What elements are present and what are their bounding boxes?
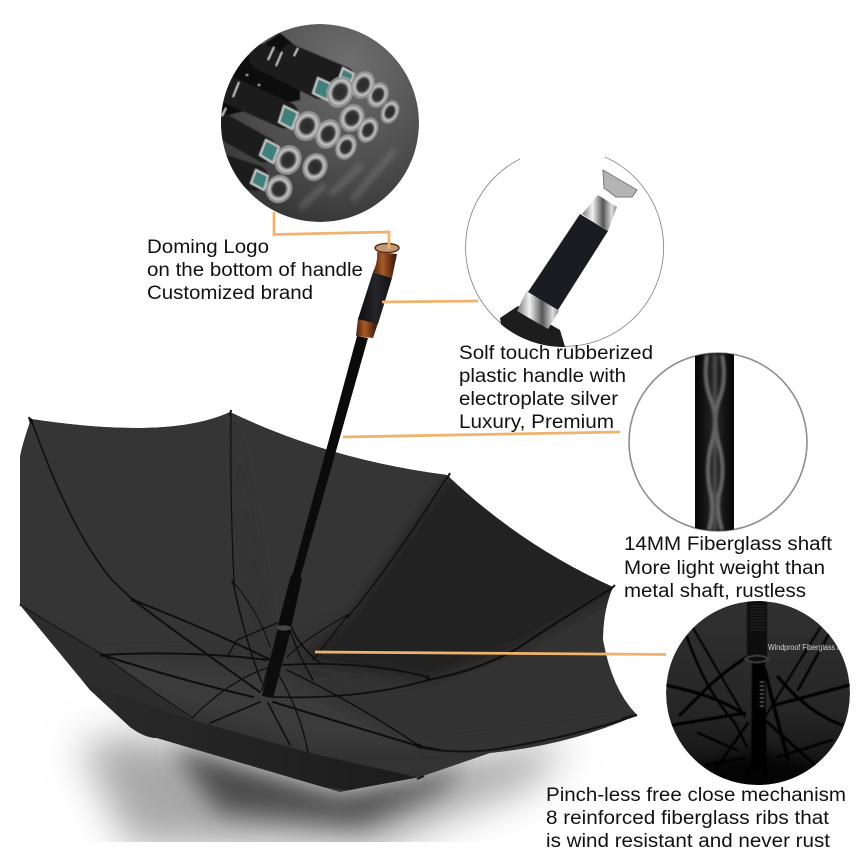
text: handle description: plastic handle with [459, 366, 626, 387]
lower spring section [262, 627, 291, 698]
handle bodies [215, 53, 345, 178]
runner ring [277, 625, 291, 631]
rib joints [100, 580, 430, 748]
text: doming logo: Customized brand [147, 283, 313, 304]
text: handle description: Solf touch rubberized [459, 343, 653, 364]
shaft body [695, 352, 734, 532]
circle: rubberized handle detail [466, 157, 664, 350]
rubber grip [358, 272, 392, 324]
spring [750, 606, 765, 630]
panel: front band [86, 684, 418, 790]
umbrella shadow [80, 735, 570, 848]
text: shaft description: metal shaft, rustless [624, 581, 806, 602]
circle: handle bottoms with logo [215, 24, 419, 222]
teal brackets [251, 68, 354, 190]
line: grip to handle detail [382, 301, 478, 302]
silver ring [517, 290, 559, 329]
base cap [500, 306, 566, 350]
text: shaft description [624, 534, 833, 602]
panel: left canopy [20, 412, 236, 626]
woven texture [706, 355, 724, 530]
silver bands [222, 47, 298, 116]
line: shaft to shaft detail [343, 432, 620, 437]
top cap [603, 170, 637, 197]
panel: top canopy [227, 412, 454, 482]
bottom dark [694, 753, 822, 785]
ribs [665, 628, 850, 780]
canopy soft panels [20, 412, 636, 792]
text: mechanism description: 8 reinforced fiberglass ribs that [546, 808, 830, 829]
rim edge right [418, 715, 637, 751]
text: doming logo [147, 237, 363, 304]
panel: far right canopy [585, 590, 636, 734]
text: mechanism description: is wind resistant and never rust [546, 831, 831, 852]
shaft sleeve [278, 575, 302, 628]
panel: lower canopy [116, 662, 387, 743]
rubber grip [528, 214, 608, 310]
text: handle description [459, 343, 653, 433]
silver cone [582, 195, 617, 231]
circle outline [466, 157, 664, 346]
collar [745, 656, 769, 662]
text: mechanism description [546, 785, 846, 852]
panel: right canopy [306, 477, 612, 680]
handle caps [261, 68, 403, 207]
rib tips [29, 410, 637, 779]
line: logo to handle cap [274, 212, 389, 249]
text: shaft description: More light weight than [624, 558, 825, 579]
panel: lower left rim [20, 605, 193, 720]
copper top [373, 252, 397, 278]
umbrella shaft and handle [262, 244, 399, 698]
circle: fiberglass shaft detail [629, 352, 807, 532]
text: shaft description: 14MM Fiberglass shaft [624, 534, 833, 555]
central shaft [747, 598, 767, 658]
text: handle description: Luxury, Premium [459, 412, 614, 433]
shaft [291, 336, 368, 582]
crumpled canopy [216, 33, 300, 118]
text: doming logo: Doming Logo [147, 237, 269, 258]
text: mechanism description: Pinch-less free close mechanism [546, 785, 846, 806]
canopy ribs [20, 414, 612, 752]
text: doming logo: on the bottom of handle [147, 260, 363, 281]
connector lines [274, 212, 666, 654]
handle cap [375, 244, 399, 252]
image caption: Windproof Fiberglass R [768, 643, 842, 652]
handle group [215, 33, 403, 207]
umbrella canopy [19, 410, 638, 792]
text: handle description: electroplate silver [459, 389, 619, 410]
light reflections [300, 150, 395, 208]
bottom collar [356, 318, 378, 338]
circle: close mechanism detail [665, 598, 850, 800]
line: mechanism to detail [315, 652, 666, 654]
